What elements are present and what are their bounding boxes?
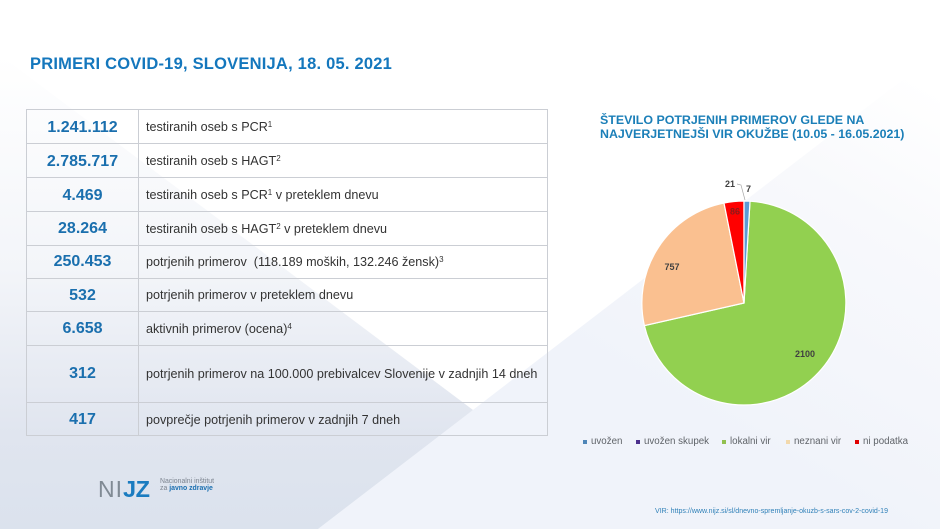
leader line bbox=[737, 184, 745, 200]
legend: neznani vir bbox=[786, 440, 790, 444]
row: active cases: 6.658 bbox=[62, 320, 103, 336]
row: active cases bbox=[27, 312, 547, 346]
legend: neznani vir bbox=[794, 436, 841, 447]
row: 7 day average: povprečje potrjenih primerov v zadnjih 7 dneh bbox=[146, 412, 400, 426]
chart title: ŠTEVILO POTRJENIH PRIMEROV GLEDE NA bbox=[600, 112, 864, 126]
legend: lokalni vir bbox=[722, 440, 726, 444]
label 86: 86 bbox=[730, 206, 740, 216]
logo tagline: za javno zdravje bbox=[160, 484, 213, 492]
data table bbox=[26, 109, 548, 436]
row: PCR previous day: testiranih oseb s PCR1 v preteklem dnevu bbox=[146, 188, 379, 202]
row: HAGT tested: testiranih oseb s HAGT2 bbox=[146, 154, 281, 168]
row: confirmed cases bbox=[27, 246, 547, 279]
row: confirmed cases: 250.453 bbox=[54, 253, 111, 270]
title: PRIMERI COVID-19, SLOVENIJA, 18. 05. 2021 bbox=[30, 55, 392, 73]
legend: uvožen bbox=[583, 440, 587, 444]
row: PCR tested: 1.241.112 bbox=[47, 118, 118, 136]
row: HAGT previous day: testiranih oseb s HAGT2 v preteklem dnevu bbox=[146, 222, 387, 236]
row: 14 day incidence: 312 bbox=[69, 365, 96, 382]
label 2100: 2100 bbox=[795, 349, 815, 359]
row: HAGT tested: 2.785.717 bbox=[47, 152, 118, 170]
label 757: 757 bbox=[664, 262, 680, 272]
slice: neznani vir bbox=[642, 203, 744, 326]
legend: uvožen skupek bbox=[644, 436, 709, 447]
row: PCR previous day bbox=[27, 178, 547, 212]
pie chart bbox=[642, 179, 846, 406]
row: HAGT previous day bbox=[27, 212, 547, 246]
logo tagline: Nacionalni inštitut bbox=[160, 478, 214, 485]
legend: ni podatka bbox=[863, 436, 908, 447]
row: active cases: aktivnih primerov (ocena)4 bbox=[146, 322, 292, 336]
chart title: NAJVERJETNEJŠI VIR OKUŽBE (10.05 - 16.05.2021) bbox=[600, 127, 904, 141]
row: 7 day average: 417 bbox=[69, 410, 96, 428]
row: 14 day incidence bbox=[27, 346, 547, 403]
row: confirmed cases: potrjenih primerov (118.189 moških, 132.246 žensk)3 bbox=[146, 255, 444, 269]
row: PCR previous day: 4.469 bbox=[62, 186, 103, 204]
legend: uvožen bbox=[591, 436, 622, 447]
legend: lokalni vir bbox=[730, 436, 771, 447]
row: confirmed previous day: 532 bbox=[69, 287, 96, 304]
slice: ni podatka bbox=[724, 201, 744, 303]
legend bbox=[583, 436, 908, 447]
label 7: 7 bbox=[746, 184, 751, 194]
logo: NIJZ bbox=[98, 476, 214, 502]
row: PCR tested: testiranih oseb s PCR1 bbox=[146, 120, 272, 134]
row: 14 day incidence: potrjenih primerov na 100.000 prebivalcev Slovenije v zadnjih 14 dneh bbox=[146, 367, 537, 381]
label 21: 21 bbox=[725, 179, 735, 189]
slice: lokalni vir bbox=[644, 201, 846, 405]
logo tagline bbox=[160, 478, 214, 492]
chart title bbox=[600, 112, 904, 141]
row: HAGT previous day: 28.264 bbox=[58, 220, 107, 236]
source line: VIR: https://www.nijz.si/sl/dnevno-spremljanje-okuzb-s-sars-cov-2-covid-19 bbox=[655, 508, 888, 515]
legend: uvožen skupek bbox=[636, 440, 640, 444]
logo wordmark: NIJZ bbox=[98, 476, 149, 502]
legend: ni podatka bbox=[855, 440, 859, 444]
row: 7 day average bbox=[69, 403, 400, 435]
row: HAGT tested bbox=[27, 144, 547, 178]
row: confirmed previous day bbox=[27, 279, 547, 312]
row: confirmed previous day: potrjenih primerov v preteklem dnevu bbox=[146, 288, 353, 302]
row: PCR tested bbox=[27, 110, 547, 144]
slice: uvožen bbox=[744, 201, 750, 303]
